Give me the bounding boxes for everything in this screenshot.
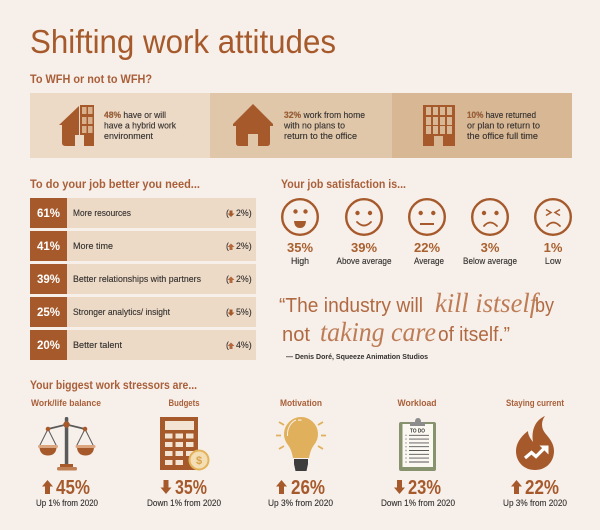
panel: hybrid	[30, 93, 210, 158]
quote attribution: — Denis Doré, Squeeze Animation Studios	[286, 352, 428, 361]
stressor: staying current: Up 3% from 2020	[503, 498, 567, 508]
face: low	[535, 199, 571, 266]
row: stronger analytics: 25%	[37, 307, 60, 319]
face: high: 35%	[287, 240, 313, 255]
icon: office building	[423, 105, 455, 146]
row: better talent: (	[226, 340, 229, 350]
icon: flame with trend arrow	[516, 416, 554, 470]
text: office line 3: the office full time	[467, 131, 538, 141]
face: above average: Above average	[336, 256, 392, 266]
face: below average: 3%	[481, 240, 500, 255]
text: home line 3: return to the office	[284, 131, 357, 141]
icon: calculator: $	[196, 455, 202, 467]
arrow: up	[276, 480, 287, 494]
stressor: motivation: Up 3% from 2020	[268, 498, 333, 508]
stressor: work/life balance: Up 1% from 2020	[36, 498, 98, 508]
row: more time: More time	[73, 241, 113, 251]
heading: job satisfaction: Your job satisfaction is...	[281, 179, 406, 191]
row: more resources: (	[226, 208, 229, 218]
face: low: 1%	[544, 240, 563, 255]
face: high	[282, 199, 318, 266]
row: more resources: More resources	[73, 208, 132, 218]
face: average: Average	[414, 256, 444, 266]
text: hybrid line 3: environment	[104, 131, 154, 141]
row: better talent: 20%	[37, 340, 60, 352]
face: average: 22%	[414, 240, 440, 255]
quote: “The industry will	[279, 295, 423, 317]
row: more time: 2%)	[236, 241, 252, 251]
face: average	[409, 199, 445, 266]
text: hybrid: 48% have or will	[104, 110, 166, 120]
row: more time	[30, 231, 256, 261]
icon: hybrid house and building	[59, 105, 94, 146]
face: low: Low	[545, 256, 562, 266]
stressor: motivation: Motivation	[280, 398, 322, 408]
stressor: workload: 23%	[408, 477, 441, 499]
panel: office	[392, 93, 572, 158]
row: better relationships: 39%	[37, 274, 60, 286]
face: high: High	[291, 256, 309, 266]
row: stronger analytics	[30, 297, 256, 327]
stressor: staying current	[503, 398, 567, 508]
quote: by	[535, 295, 554, 317]
icon: light bulb	[276, 417, 326, 471]
row: better relationships: 2%)	[236, 274, 252, 284]
quote: of itself.”	[438, 324, 510, 346]
stressor: staying current: 22%	[525, 477, 559, 499]
icon: clipboard: TO DO	[410, 428, 426, 434]
face: below average: Below average	[463, 256, 517, 266]
row: better relationships: Better relationships with partners	[73, 274, 202, 284]
stressor: budgets: Budgets	[168, 398, 200, 408]
row: more resources	[30, 198, 256, 228]
heading: job needs: To do your job better you need...	[30, 179, 200, 191]
quote	[279, 288, 554, 347]
quote: not	[282, 324, 310, 346]
arrow: down	[394, 480, 405, 494]
face: above average	[336, 199, 392, 266]
row: better relationships	[30, 264, 256, 294]
stressor: workload: Down 1% from 2020	[381, 498, 455, 508]
stressor: workload	[381, 398, 455, 508]
stressor: workload: Workload	[398, 398, 436, 408]
row: more resources: 61%	[37, 208, 60, 220]
stressor: staying current: Staying current	[506, 398, 564, 408]
icon: scales	[38, 417, 96, 470]
row: stronger analytics: Stronger analytics/ insight	[73, 307, 171, 317]
stressor: work/life balance: Work/life balance	[31, 398, 101, 408]
text: home line 2: with no plans to	[283, 120, 345, 130]
stressor: budgets	[147, 398, 221, 508]
text: hybrid line 2: have a hybrid work	[104, 120, 177, 130]
row: better talent: 4%)	[236, 340, 252, 350]
stressor: work/life balance	[31, 398, 101, 508]
row: stronger analytics: 5%)	[236, 307, 252, 317]
quote: kill istself	[435, 288, 540, 318]
text: home: 32% work from home	[284, 110, 365, 120]
arrow: up	[511, 480, 522, 494]
row: stronger analytics: (	[226, 307, 229, 317]
stressor: motivation	[268, 398, 333, 508]
row: more time: 41%	[37, 241, 60, 253]
row: better talent: Better talent	[73, 340, 123, 350]
row: better talent	[30, 330, 256, 360]
quote: taking care	[320, 317, 436, 347]
icon: house	[233, 104, 273, 146]
text: office: 10% have returned	[467, 110, 536, 120]
face: above average: 39%	[351, 240, 377, 255]
panel: home	[210, 93, 392, 158]
heading: WFH: To WFH or not to WFH?	[30, 74, 152, 86]
title: Shifting work attitudes	[30, 23, 336, 60]
face: below average	[463, 199, 517, 266]
arrow: up	[42, 480, 53, 494]
row: more resources: 2%)	[236, 208, 252, 218]
stressor: budgets: 35%	[175, 477, 207, 499]
row: better relationships: (	[226, 274, 229, 284]
stressor: motivation: 26%	[291, 477, 325, 499]
stressor: budgets: Down 1% from 2020	[147, 498, 221, 508]
stressor: work/life balance: 45%	[56, 477, 90, 499]
arrow: down	[160, 480, 172, 494]
text: office line 2: or plan to return to	[467, 120, 540, 130]
heading: stressors: Your biggest work stressors are...	[30, 380, 197, 392]
row: more time: (	[226, 241, 229, 251]
